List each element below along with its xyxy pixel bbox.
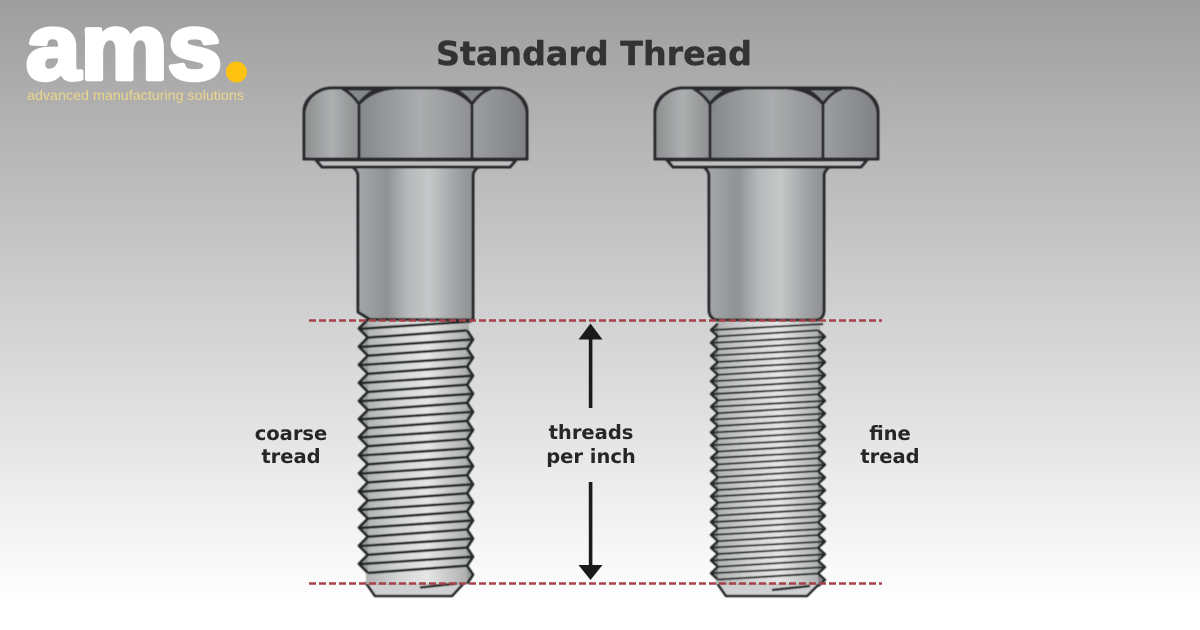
label: coarse tread: tread bbox=[261, 445, 321, 468]
label: fine tread: fine bbox=[869, 422, 911, 445]
title: Standard Thread bbox=[436, 34, 752, 73]
red dashed guide: top bbox=[309, 319, 882, 322]
label: fine tread: tread bbox=[860, 445, 920, 468]
label: threads per inch: per inch bbox=[546, 445, 636, 468]
label: threads per inch: threads bbox=[549, 421, 633, 444]
logo: ams: advanced manufacturing solutions bbox=[27, 88, 244, 103]
label: coarse tread: coarse bbox=[255, 422, 327, 445]
red dashed guide: bottom bbox=[309, 582, 882, 585]
coarse bolt bbox=[304, 88, 527, 596]
arrow: up bbox=[578, 324, 602, 408]
fine bolt bbox=[655, 88, 878, 596]
arrow: down bbox=[578, 482, 602, 580]
